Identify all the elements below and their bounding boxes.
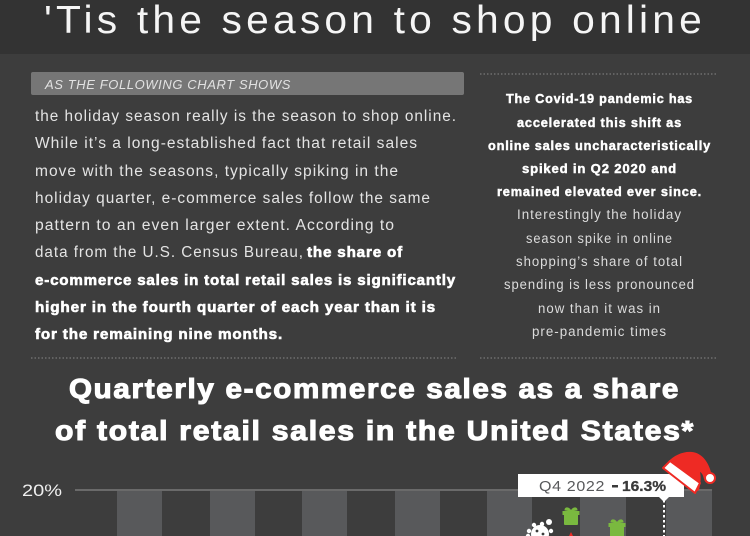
icon: gift	[608, 520, 626, 536]
right text block: season spike in online	[526, 231, 673, 246]
icon: virus	[526, 519, 553, 536]
right text block: now than it was in	[538, 301, 661, 316]
axis label 20%: 20%	[22, 481, 62, 500]
left text block: higher in the fourth quarter of each year than it is	[35, 299, 436, 316]
left text block: data from the U.S. Census Bureau,	[35, 244, 304, 261]
icon: santa hat	[663, 452, 715, 493]
gridline	[75, 489, 712, 491]
right text block: spending is less pronounced	[504, 277, 695, 292]
chart heading: of total retail sales in the United States*	[55, 415, 695, 446]
dotted marker line	[663, 500, 665, 536]
left text block: holiday quarter, e-commerce sales follow the same	[35, 190, 431, 207]
callout	[518, 474, 684, 502]
left text block: the holiday season really is the season to shop online.	[35, 108, 457, 125]
chart	[22, 452, 715, 536]
section label bar	[31, 72, 464, 95]
left text block: the share of	[307, 244, 403, 261]
right text block: online sales uncharacteristically	[488, 138, 711, 153]
right text block: accelerated this shift as	[517, 115, 682, 130]
right text block	[488, 91, 711, 339]
icon: gift	[562, 508, 580, 525]
title band	[0, 0, 750, 54]
left text block: While it’s a long-established fact that retail sales	[35, 135, 418, 152]
right text block: pre-pandemic times	[532, 324, 667, 339]
section label bar: AS THE FOLLOWING CHART SHOWS	[44, 77, 291, 92]
right text block: The Covid-19 pandemic has	[506, 91, 693, 106]
right text block: spiked in Q2 2020 and	[522, 161, 677, 176]
chart heading: Quarterly e-commerce sales as a share	[69, 373, 680, 404]
red marker tip	[569, 532, 573, 536]
right text block: remained elevated ever since.	[497, 184, 702, 199]
chart heading	[55, 373, 695, 446]
title band: 'Tis the season to shop online	[44, 0, 706, 42]
left text block: e-commerce sales in total retail sales is significantly	[35, 272, 456, 289]
left text block: pattern to an even larger extent. According to	[35, 217, 395, 234]
left text block: for the remaining nine months.	[35, 326, 283, 343]
left text block: move with the seasons, typically spiking in the	[35, 163, 399, 180]
right text block: Interestingly the holiday	[517, 207, 682, 222]
right text block: shopping’s share of total	[516, 254, 683, 269]
left text block	[35, 108, 457, 343]
callout: 16.3%	[622, 478, 666, 495]
chart bands	[117, 490, 712, 536]
callout: Q4 2022	[539, 478, 605, 495]
